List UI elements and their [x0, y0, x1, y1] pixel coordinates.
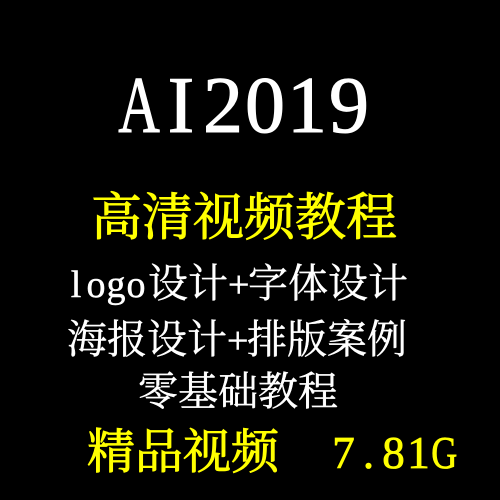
- footer: file size: 1: [407, 428, 430, 478]
- text line: logo and font design: l: [71, 264, 81, 306]
- text line: logo and font design: o: [86, 264, 106, 306]
- footer: file size: [332, 428, 457, 478]
- footer: premium video label: 精品视频: [87, 413, 279, 482]
- title: AI2019: 1: [287, 62, 327, 150]
- title: AI2019: [118, 62, 369, 150]
- footer: file size: .: [363, 428, 374, 478]
- footer: file size: 8: [382, 428, 405, 478]
- text line: poster design and layout cases: 海报设计 排版案例: [67, 308, 407, 365]
- title: AI2019: I: [168, 62, 194, 150]
- text line: logo and font design: +: [228, 264, 249, 306]
- title: AI2019: 2: [203, 62, 243, 150]
- text line: poster design and layout cases: +: [227, 320, 248, 362]
- subtitle: HD video tutorial: 高清视频教程: [91, 176, 397, 250]
- title: AI2019: A: [118, 62, 160, 150]
- footer: file size: 7: [332, 428, 355, 478]
- text line: zero-basics tutorial: 零基础教程: [138, 360, 338, 417]
- footer: file size: G: [431, 428, 457, 478]
- text line: logo and font design: g: [106, 264, 126, 306]
- text line: logo and font design: 设计 字体设计: [148, 252, 408, 309]
- text line: logo and font design: o: [126, 264, 146, 306]
- title: AI2019: 0: [245, 62, 285, 150]
- title: AI2019: 9: [329, 62, 369, 150]
